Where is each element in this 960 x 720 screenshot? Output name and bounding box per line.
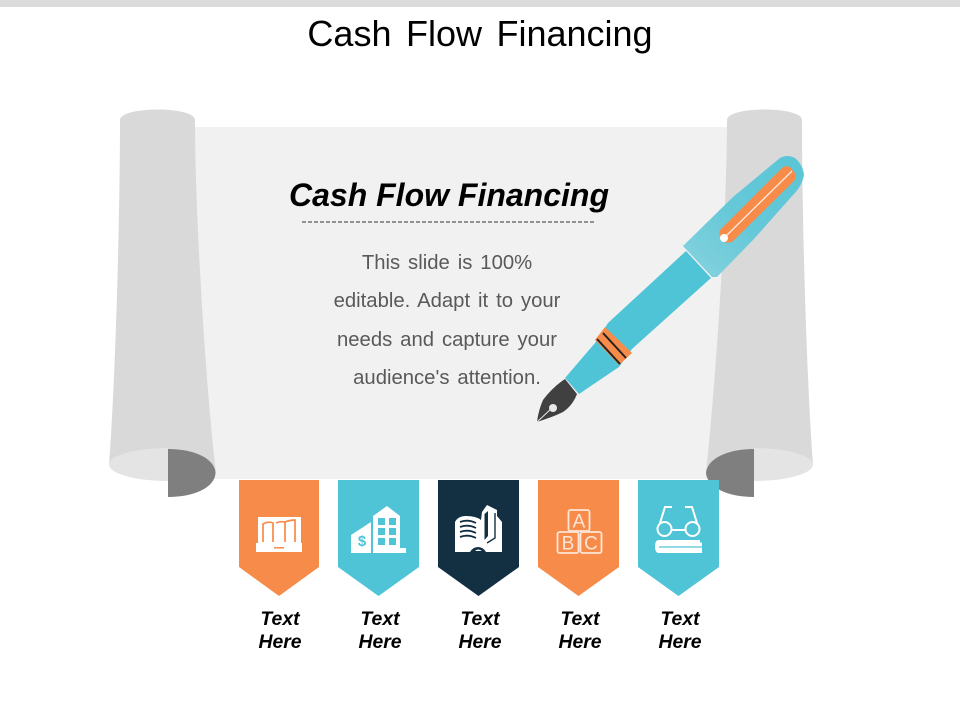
pen ring: [595, 327, 632, 365]
label: text here 5: Here: [658, 631, 702, 653]
label: text here 1: Text: [260, 608, 301, 630]
banner: glasses on book: [638, 480, 719, 596]
label: text here 3: [458, 608, 502, 653]
banner: abc blocks: [538, 480, 619, 596]
body text: [334, 252, 561, 389]
label: text here 1: Here: [258, 631, 302, 653]
label: text here 2: [358, 608, 402, 653]
label: text here 2: Here: [358, 631, 402, 653]
icon: open book: [455, 505, 502, 552]
label: text here 4: [558, 608, 602, 653]
body text: This slide is 100%: [362, 252, 532, 274]
pen cap: [683, 156, 804, 277]
banner: laptop: [239, 480, 319, 596]
icon: abc blocks: C: [584, 534, 598, 554]
icon: office building with dollar: $: [358, 533, 367, 550]
pen nib: [537, 379, 577, 422]
icon: fountain pen: [537, 156, 804, 422]
label: text here 4: Text: [560, 608, 601, 630]
body text: audience's attention.: [353, 367, 541, 389]
body text: needs and capture your: [337, 329, 557, 351]
panel: paper scroll: [109, 110, 813, 497]
label: text here 5: Text: [660, 608, 701, 630]
pen clip: [719, 166, 796, 243]
left scroll roll: [109, 110, 216, 497]
pen barrel: [565, 251, 711, 394]
label: text here 5: [658, 608, 702, 653]
banner: building: [338, 480, 419, 596]
icon: laptop with books: [256, 517, 302, 552]
paper sheet: [190, 127, 732, 479]
body text: editable. Adapt it to your: [334, 290, 561, 312]
label: text here 2: Text: [360, 608, 401, 630]
label: text here 1: [258, 608, 302, 653]
banner: open book: [438, 480, 519, 596]
heading: Cash Flow Financing: [289, 177, 609, 213]
icon: glasses on book: [655, 507, 702, 553]
label: text here 3: Here: [458, 631, 502, 653]
label: text here 4: Here: [558, 631, 602, 653]
icon: abc blocks: B: [562, 534, 574, 554]
icon: abc blocks: [558, 510, 602, 554]
label: text here 3: Text: [460, 608, 501, 630]
title: Cash Flow Financing: [307, 13, 653, 54]
right scroll roll: [706, 110, 813, 497]
icon: abc blocks: A: [573, 512, 586, 532]
